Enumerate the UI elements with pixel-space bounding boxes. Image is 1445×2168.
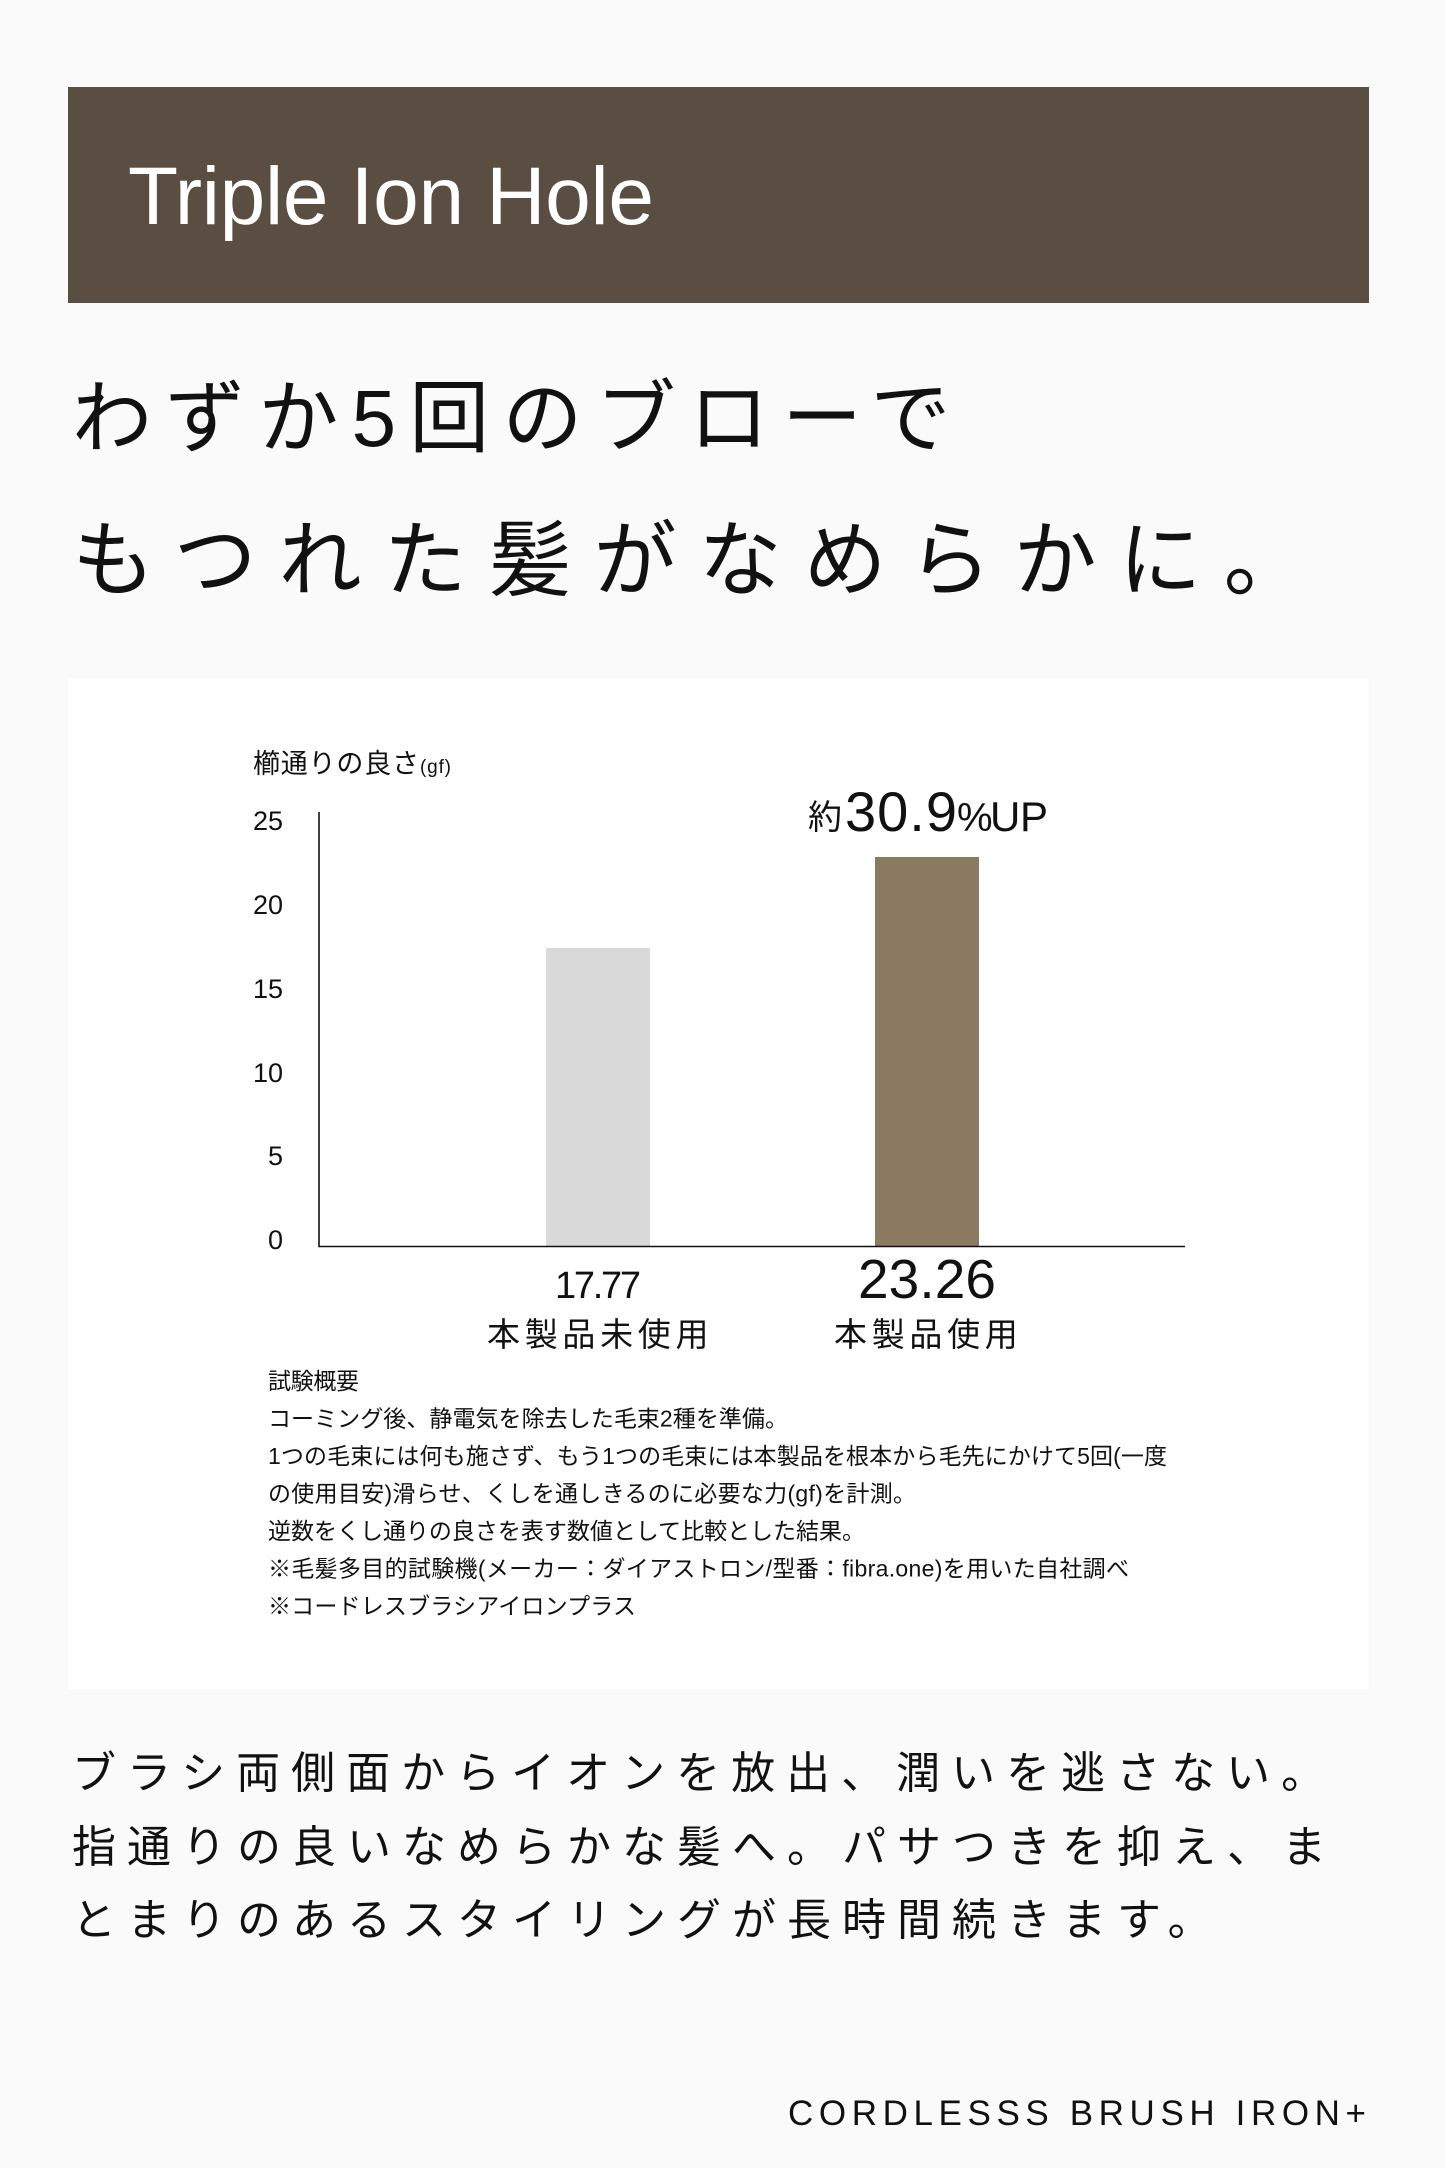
y axis labels: 0 [268, 1225, 283, 1255]
test summary notes: 1つの毛束には何も施さず、もう1つの毛束には本製品を根本から毛先にかけて5回(一度 [268, 1443, 1167, 1469]
y axis labels [253, 806, 283, 1255]
test summary notes [268, 1368, 1167, 1619]
category label: without product: 本製品未使用 [487, 1316, 713, 1353]
body copy: 指通りの良いなめらかな髪へ。パサつきを抑え、ま [72, 1823, 1337, 1872]
test summary notes: コーミング後、静電気を除去した毛束2種を準備。 [268, 1406, 788, 1432]
category label: with product: 本製品使用 [834, 1316, 1022, 1353]
chart heading: 櫛通りの良さ [253, 749, 419, 779]
panel: chart and test summary [68, 678, 1369, 1689]
test summary notes: ※コードレスブラシアイロンプラス [268, 1593, 636, 1619]
title text: Triple Ion Hole [128, 151, 654, 242]
test summary notes: の使用目安)滑らせ、くしを通しきるのに必要な力(gf)を計測。 [268, 1480, 916, 1506]
chart heading: (gf) [420, 757, 451, 778]
bar chart [253, 780, 1185, 1353]
y axis labels: 10 [253, 1058, 283, 1088]
headline [72, 374, 1329, 607]
body copy [72, 1749, 1337, 1945]
headline: もつれた髪がなめらかに。 [72, 514, 1329, 607]
callout: about 30.9% up: UP [990, 793, 1048, 840]
test summary notes: 逆数をくし通りの良さを表す数値として比較とした結果。 [268, 1518, 865, 1544]
test summary notes: 試験概要 [268, 1368, 359, 1394]
axes [319, 812, 1185, 1246]
callout: about 30.9% up: % [957, 796, 993, 840]
footer product name: CORDLESSS BRUSH IRON+ [788, 2094, 1366, 2133]
body copy: ブラシ両側面からイオンを放出、潤いを逃さない。 [72, 1749, 1336, 1798]
body copy: とまりのあるスタイリングが長時間続きます。 [72, 1896, 1223, 1945]
y axis labels: 5 [268, 1141, 283, 1171]
callout: about 30.9% up: 約 [808, 799, 842, 837]
y axis labels: 20 [253, 890, 283, 920]
callout: about 30.9% up: 30.9 [845, 780, 957, 843]
y axis labels: 25 [253, 806, 283, 836]
title banner [68, 87, 1369, 303]
value: 23.26: 23.26 [858, 1248, 996, 1310]
callout: about 30.9% up [808, 780, 1048, 843]
test summary notes: ※毛髪多目的試験機(メーカー：ダイアストロン/型番：fibra.one)を用いた自社調べ [268, 1556, 1129, 1582]
value: 17.77: 17.77 [555, 1265, 641, 1307]
headline: わずか5回のブローで [72, 374, 964, 463]
y axis labels: 15 [253, 974, 283, 1004]
bar: with product 23.26 [875, 857, 979, 1246]
bar: without product 17.77 [546, 948, 650, 1246]
